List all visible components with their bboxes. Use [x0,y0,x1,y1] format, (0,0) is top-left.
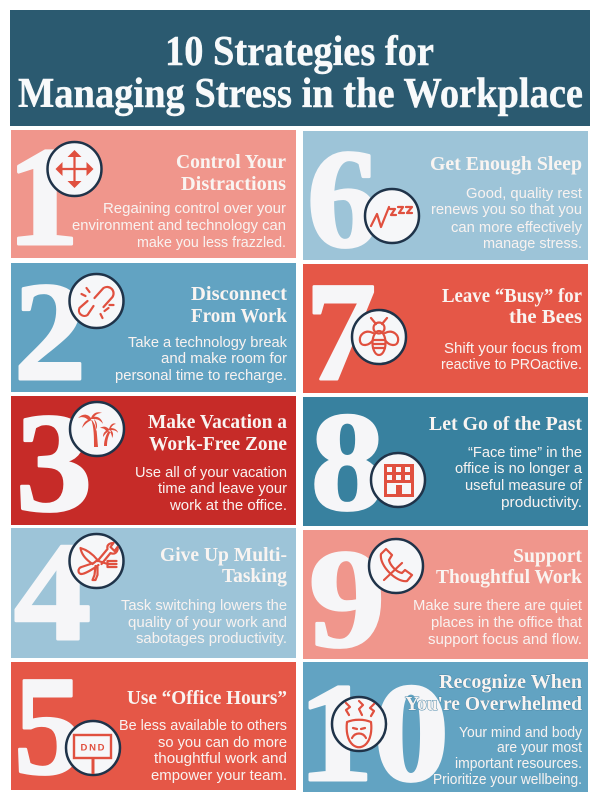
panel 3: make vacation a work-free zone [11,385,296,541]
body text: time and leave your [158,481,287,497]
heading [405,672,582,715]
panel 4: give up multi-tasking [11,514,296,670]
icon: office building [371,453,425,507]
heading: Make Vacation a [148,412,287,433]
heading: Work-Free Zone [149,434,287,455]
icon: sleep zigzag [365,189,419,243]
body text: Good, quality rest [466,186,582,202]
icon: DND sign [66,721,120,775]
panel 2: disconnect from work [11,254,296,410]
body text: Shift your focus from [444,341,582,357]
body text: quality of your work and [128,615,287,631]
body text: thoughtful work and [154,751,287,767]
icon: four-way arrows [48,142,102,196]
heading: the Bees [509,307,582,328]
heading [148,412,287,455]
icon: bee [352,310,406,364]
heading: Recognize When [439,672,582,693]
body text [115,335,288,384]
heading [176,152,286,195]
body text: productivity. [501,495,582,511]
body text: environment and technology can [72,218,286,234]
body text: renews you so that you [431,202,582,218]
body text [119,718,287,784]
number 8: 8 [311,384,384,540]
heading: Distractions [181,174,286,195]
heading: Tasking [222,566,287,587]
panel 7: leave busy for the bees [303,254,588,410]
heading: Support [513,546,583,567]
body text [413,598,582,648]
number 6: 6 [307,121,379,277]
body text [121,598,287,647]
body text [135,465,287,514]
body text [455,445,583,511]
number 7: 7 [306,254,376,410]
body text: “Face time” in the [468,445,582,461]
body text: office is no longer a [455,461,583,477]
heading [191,284,288,327]
number 3: 3 [16,385,92,541]
icon: broken chain [70,274,124,328]
icon: palm trees [70,402,124,456]
heading: Leave “Busy” for [442,286,582,307]
heading: Get Enough Sleep [430,154,582,175]
heading: Thoughtful Work [436,567,582,588]
heading [442,286,582,328]
heading: Disconnect [191,284,288,305]
body text: support focus and flow. [428,632,582,648]
body text: Use all of your vacation [135,465,287,481]
body text: manage stress. [483,236,582,252]
panel 10: recognize when you're overwhelmed [298,655,588,800]
title [18,29,583,117]
number 2: 2 [14,254,86,410]
number 5: 5 [14,648,83,800]
heading [436,546,583,588]
heading: Control Your [176,152,286,173]
number 4: 4 [14,514,91,670]
panel 9: support thoughtful work [303,521,588,677]
body text: Take a technology break [128,335,288,351]
panel 5: use office hours [11,648,296,800]
panel 6: get enough sleep [303,121,588,277]
icon: overwhelmed head [332,697,386,751]
body text [433,725,583,788]
body text: and make room for [161,351,287,367]
body text [441,341,582,373]
number 1: 1 [7,119,79,275]
body text: work at the office. [169,498,287,514]
heading: Use “Office Hours” [127,688,287,709]
body text: Make sure there are quiet [413,598,582,614]
icon: DND sign: DND [80,742,105,754]
number 9: 9 [309,521,385,677]
body text: Regaining control over your [103,201,286,217]
body text: can more effectively [451,220,583,236]
heading [160,545,287,587]
body text: reactive to PROactive. [441,357,582,373]
heading: Let Go of the Past [429,414,583,435]
body text: Task switching lowers the [121,598,287,614]
icon: crossed tools [70,534,124,588]
body text: useful measure of [465,478,583,494]
body text: sabotages productivity. [136,631,287,647]
panel 8: let go of the past [303,384,588,540]
body text: are your most [497,740,582,756]
body text [431,186,583,252]
body text: Prioritize your wellbeing. [433,772,582,788]
body text: empower your team. [151,768,287,784]
body text: Your mind and body [459,725,583,741]
icon: crossed-out phone [369,539,423,593]
body text: important resources. [455,756,582,772]
header banner [10,10,590,126]
body text: so you can do more [158,735,287,751]
body text [72,201,286,251]
title: 10 Strategies for [165,29,434,75]
body text: places in the office that [431,615,582,631]
body text: make you less frazzled. [137,235,286,251]
body text: personal time to recharge. [115,368,287,384]
heading: Give Up Multi- [160,545,287,566]
heading: From Work [191,306,287,327]
panel 1: control your distractions [7,119,296,275]
heading: You're Overwhelmed [405,694,582,715]
body text: Be less available to others [119,718,287,734]
